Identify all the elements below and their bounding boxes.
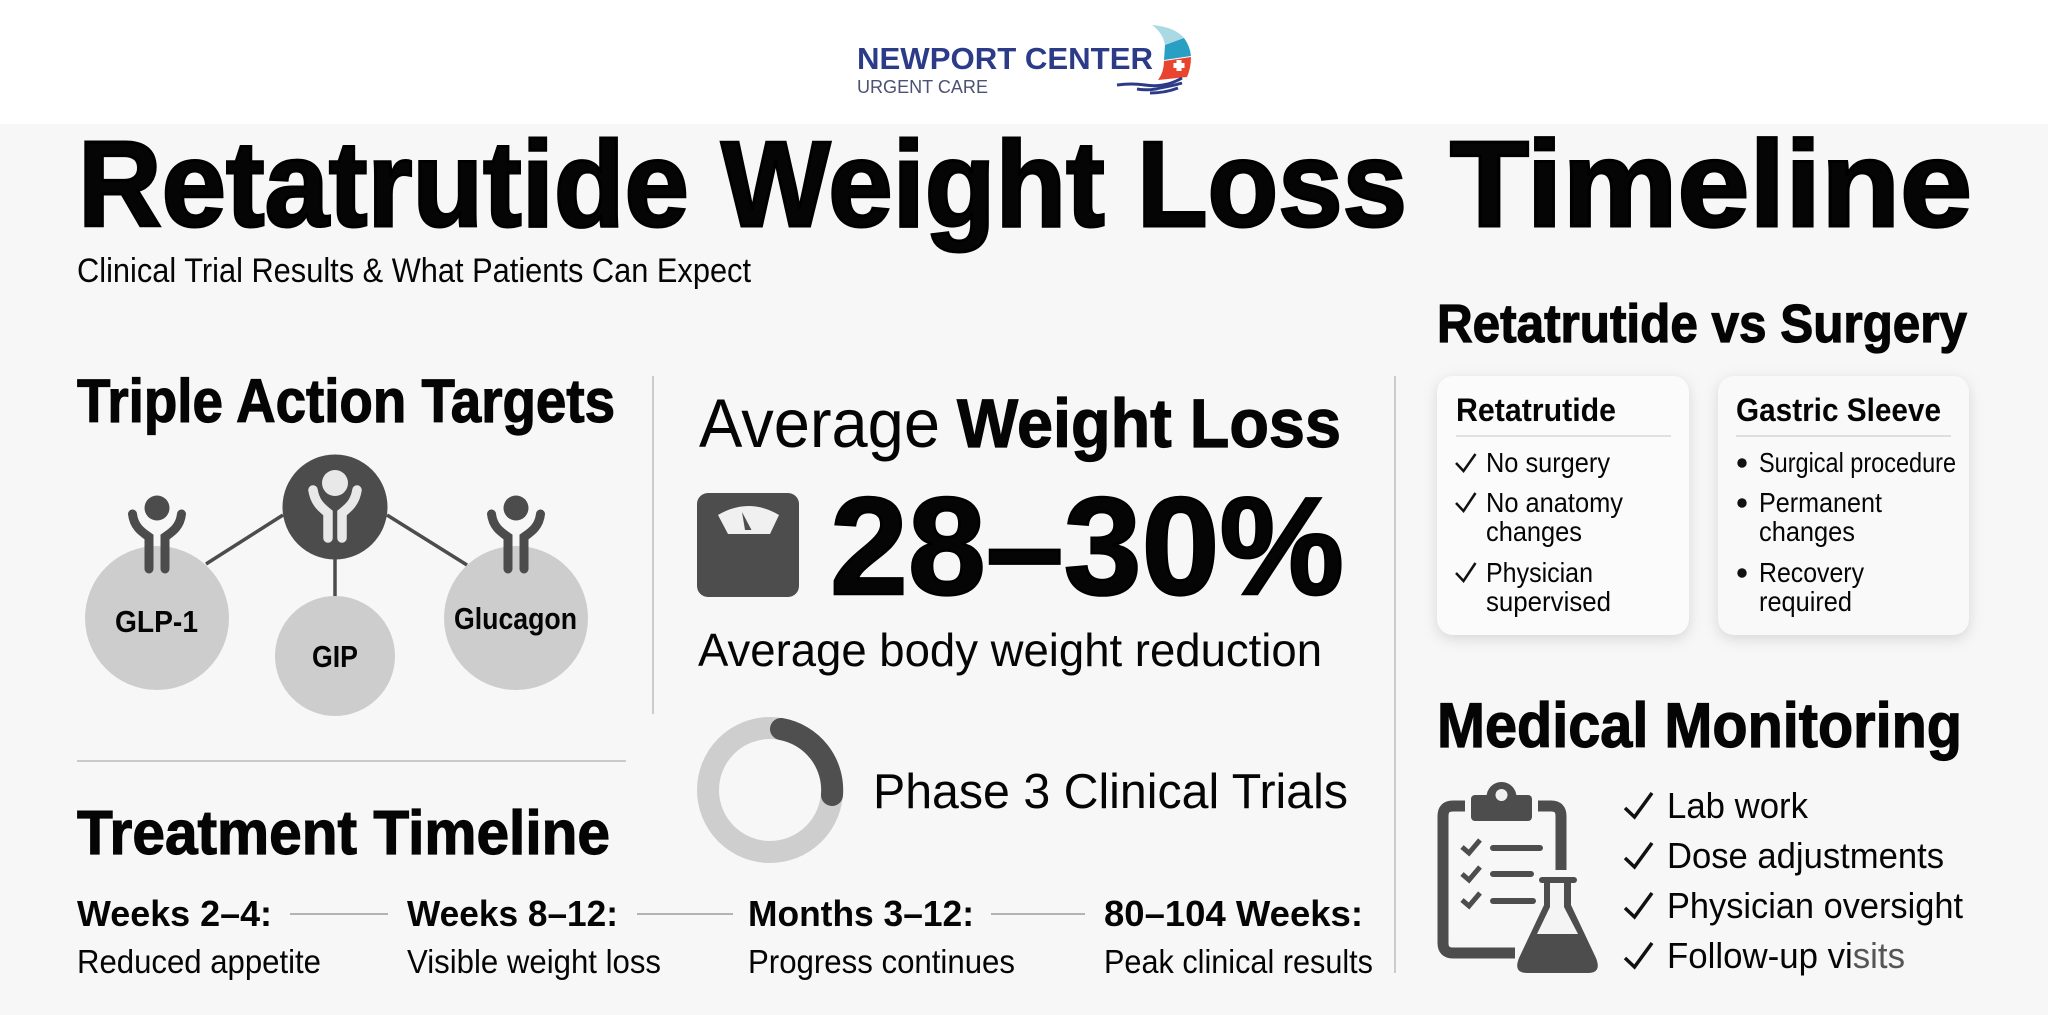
panel: Retatrutide card: No surgery <box>1486 447 1610 478</box>
subtitle: Clinical Trial Results & What Patients Can Expect <box>77 252 751 290</box>
checklist: monitoring items: Physician oversight <box>1667 885 1963 926</box>
icon: clipboard and flask <box>1443 782 1598 973</box>
node: GIP: GIP <box>312 639 358 674</box>
panel: Retatrutide card: supervised <box>1486 586 1611 617</box>
step: 80-104 weeks: Peak clinical results <box>1104 943 1373 980</box>
label: Phase 3 Clinical Trials: Phase 3 Clinical Trials <box>873 765 1348 819</box>
step: months 3-12: Months 3–12: <box>748 893 974 934</box>
step: months 3-12: Progress continues <box>748 943 1015 980</box>
node: GLP-1: GLP-1 <box>115 604 198 639</box>
step: 80-104 weeks <box>1104 893 1373 980</box>
panel: Gastric Sleeve card: Permanent <box>1759 487 1882 518</box>
heading: Average Weight Loss: Weight Loss <box>957 385 1341 462</box>
step: weeks 8-12: Weeks 8–12: <box>407 893 618 934</box>
icon: weighing scale <box>697 493 799 597</box>
logo: Newport Center Urgent Care: NEWPORT CENTER <box>857 41 1153 76</box>
heading: Retatrutide vs Surgery: Retatrutide vs Surgery <box>1437 294 1967 354</box>
checklist: monitoring items: Follow-up visits <box>1667 935 1905 976</box>
panel: Retatrutide card: Retatrutide <box>1456 392 1616 428</box>
step: weeks 8-12 <box>407 893 661 980</box>
logo: Newport Center Urgent Care: URGENT CARE <box>857 76 988 97</box>
heading: Average Weight Loss: Average <box>699 385 940 462</box>
checklist: monitoring items: Lab work <box>1667 785 1809 826</box>
stat: 28-30%: 28–30% <box>830 469 1344 624</box>
node: Glucagon: Glucagon <box>454 601 577 636</box>
title: Retatrutide Weight Loss <box>78 116 1407 252</box>
node: Glucagon <box>444 496 588 690</box>
stat caption: Average body weight reduction <box>698 624 1322 676</box>
panel: Retatrutide card: No anatomy <box>1486 487 1623 518</box>
panel: Gastric Sleeve card: Recovery <box>1759 557 1864 588</box>
panel: Retatrutide card: Physician <box>1486 557 1593 588</box>
panel: Gastric Sleeve card: Surgical procedure <box>1759 447 1956 478</box>
step: months 3-12 <box>748 893 1015 980</box>
panel: Gastric Sleeve card: Gastric Sleeve <box>1736 392 1941 428</box>
checklist: monitoring items: Dose adjustments <box>1667 835 1944 876</box>
step: weeks 2-4: Reduced appetite <box>77 943 321 980</box>
heading: Treatment Timeline: Treatment Timeline <box>77 799 610 868</box>
donut chart: Phase 3 progress <box>708 728 832 852</box>
checklist: monitoring items <box>1625 785 1963 976</box>
node: GLP-1 <box>85 496 229 690</box>
title: Timeline <box>1450 116 1972 252</box>
panel: Retatrutide card <box>1437 376 1689 635</box>
heading: Average Weight Loss <box>699 385 1341 462</box>
heading: Medical Monitoring: Medical Monitoring <box>1437 691 1962 761</box>
step: 80-104 weeks: 80–104 Weeks: <box>1104 893 1363 934</box>
step: weeks 2-4: Weeks 2–4: <box>77 893 272 934</box>
panel: Retatrutide card: changes <box>1486 516 1582 547</box>
panel: Gastric Sleeve card: required <box>1759 586 1852 617</box>
panel: Gastric Sleeve card: changes <box>1759 516 1855 547</box>
logo: Newport Center Urgent Care <box>857 25 1191 97</box>
node: GIP <box>275 596 395 716</box>
timeline <box>77 893 1373 980</box>
diagram: triple action receptors <box>85 454 588 716</box>
heading: Triple Action Targets: Triple Action Targets <box>77 367 615 435</box>
step: weeks 8-12: Visible weight loss <box>407 943 661 980</box>
panel: Gastric Sleeve card <box>1718 376 1969 635</box>
node: central receptor <box>282 454 388 560</box>
step: weeks 2-4 <box>77 893 321 980</box>
